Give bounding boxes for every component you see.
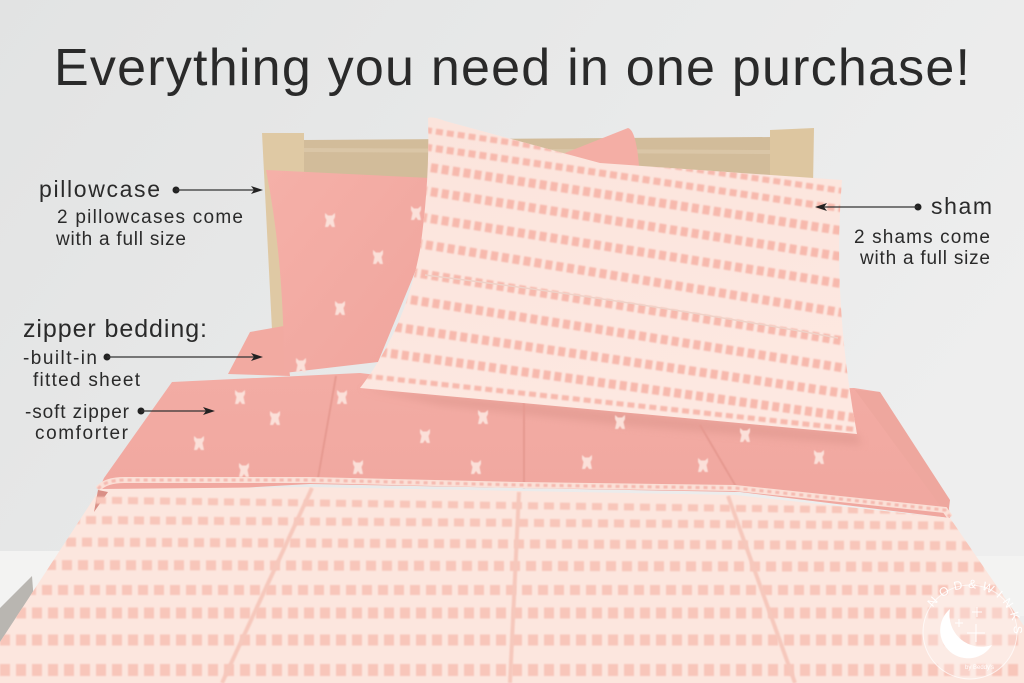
label: zipper bedding: -soft zipper bbox=[25, 402, 130, 423]
label: sham: 2 shams come bbox=[854, 227, 990, 248]
logo stars bbox=[955, 607, 985, 642]
logo tagline: by Beddy's bbox=[965, 665, 994, 671]
label: zipper bedding bbox=[23, 315, 207, 444]
label: sham: with a full size bbox=[859, 248, 990, 269]
label: zipper bedding: comforter bbox=[35, 423, 129, 444]
label: zipper bedding: -built-in bbox=[23, 348, 97, 369]
back sham corner bbox=[560, 128, 639, 175]
label: pillowcase: with a full size bbox=[55, 229, 186, 250]
moon bbox=[940, 609, 992, 658]
pillowcase bbox=[266, 170, 430, 373]
label: sham bbox=[854, 193, 992, 269]
title: Everything you need in one purchase! bbox=[54, 39, 970, 97]
label: pillowcase: 2 pillowcases come bbox=[57, 207, 243, 228]
label: sham: sham bbox=[931, 193, 992, 219]
label: zipper bedding: zipper bedding: bbox=[23, 315, 207, 343]
arrow: to fitted sheet bbox=[104, 353, 263, 361]
headboard bbox=[262, 128, 814, 330]
zipper comforter: quilted striped top bbox=[0, 487, 1024, 683]
label: zipper bedding: fitted sheet bbox=[33, 370, 141, 391]
fitted sheet bbox=[228, 326, 290, 376]
baseboard and floor bbox=[0, 551, 1024, 683]
arrow: to pillowcase bbox=[172, 186, 263, 194]
label: pillowcase bbox=[39, 176, 243, 250]
zipper comforter: pink sheet panel bbox=[96, 373, 950, 518]
logo wordmark: NOD&WINKS bbox=[927, 580, 1022, 634]
label: pillowcase: pillowcase bbox=[39, 176, 160, 202]
arrow: to comforter bbox=[138, 407, 215, 415]
arrow: to sham bbox=[815, 203, 922, 211]
brand logo bbox=[922, 580, 1022, 680]
sham pillow bbox=[360, 117, 860, 434]
